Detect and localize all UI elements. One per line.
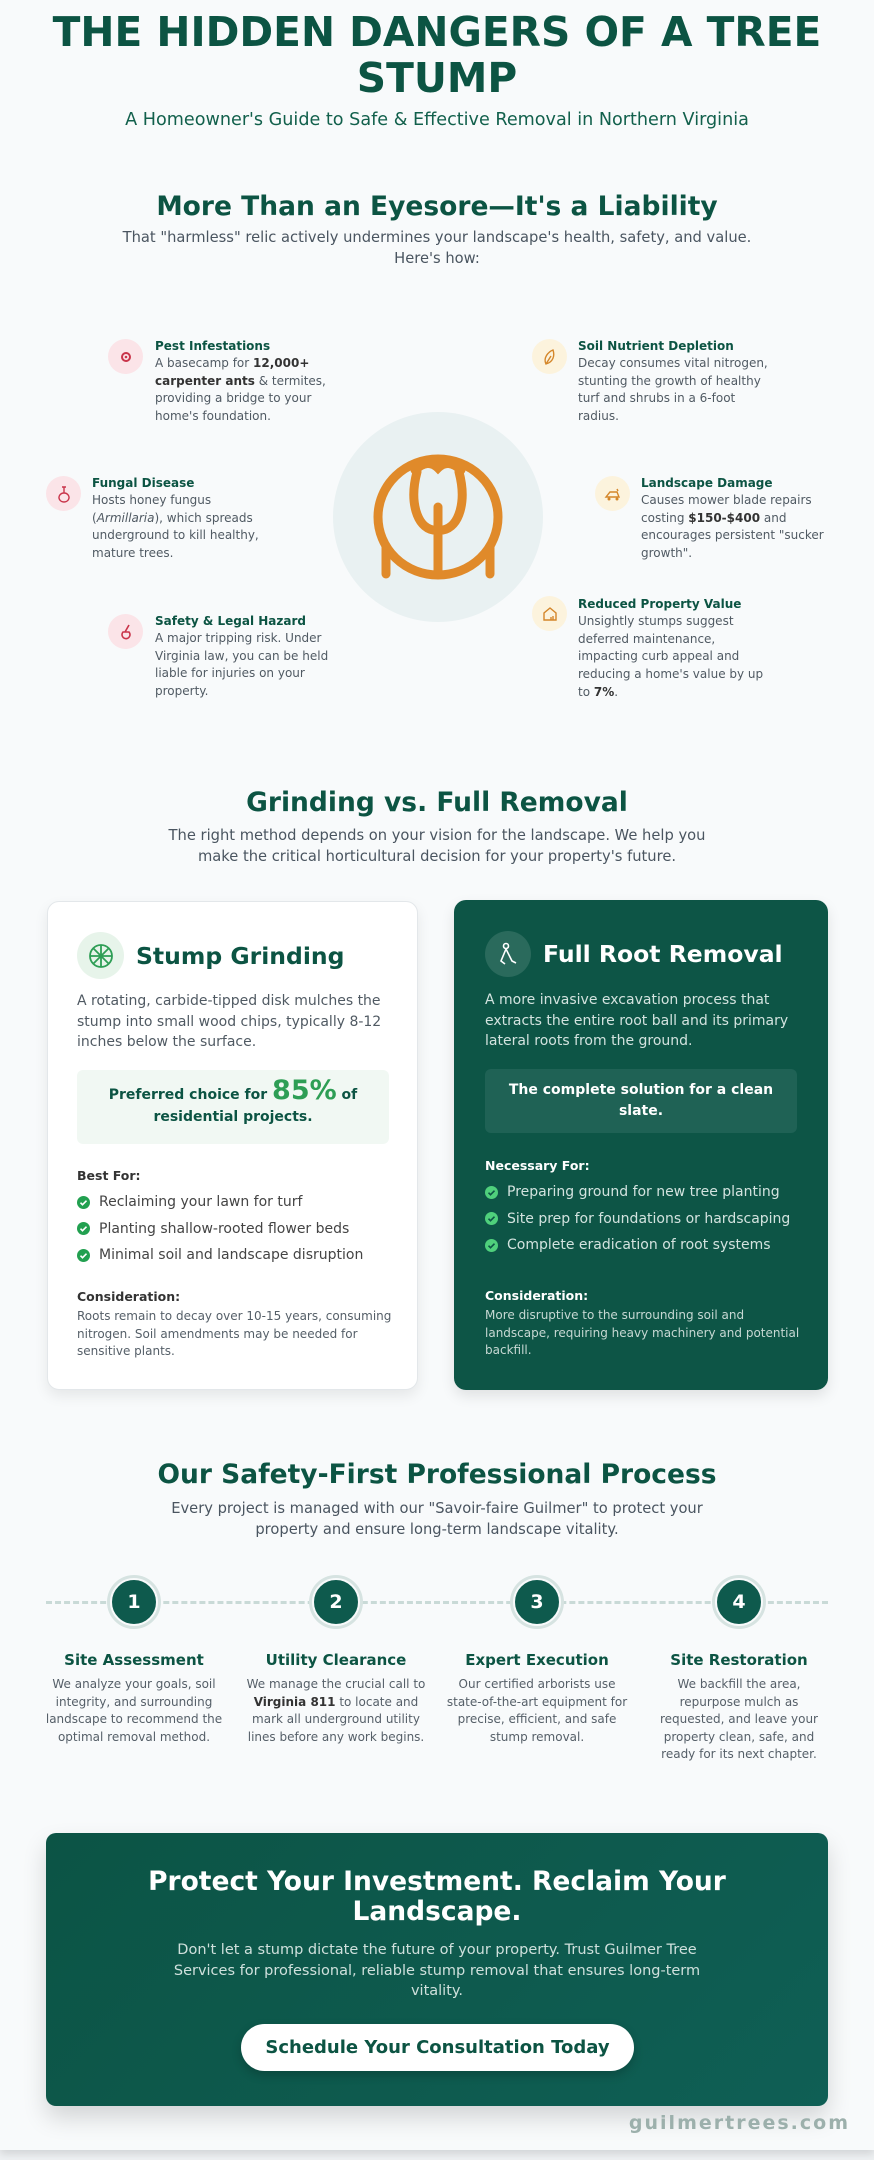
list: best for: Minimal soil and landscape disruption bbox=[99, 1247, 363, 1263]
list: necessary for: Necessary For: bbox=[485, 1158, 590, 1173]
consideration: removal: More disruptive to the surrounding soil and landscape, requiring heavy machinery and potential backfill. bbox=[485, 1308, 799, 1357]
icon: root removal bbox=[485, 931, 531, 977]
item: landscape damage bbox=[595, 476, 824, 560]
central stump illustration bbox=[333, 412, 543, 622]
step text: site assessment: We analyze your goals, soil integrity, and surrounding landscape to recommend the optimal removal method. bbox=[46, 1677, 222, 1744]
step text: expert execution: Expert Execution bbox=[465, 1651, 609, 1669]
icon: flask bbox=[46, 476, 81, 511]
icon: grinder wheel bbox=[77, 932, 124, 979]
text: Causes mower blade repairs costing $150-$400 and encourages persistent "sucker growth". bbox=[641, 493, 824, 560]
text: A basecamp for 12,000+ carpenter ants & termites, providing a bridge to your home's foundation. bbox=[155, 356, 326, 423]
list: necessary for: Preparing ground for new tree planting bbox=[507, 1184, 780, 1200]
item: soil nutrient depletion bbox=[532, 339, 768, 423]
process timeline bbox=[46, 1575, 828, 1629]
item: reduced property value bbox=[532, 596, 763, 699]
title: STUMP bbox=[357, 54, 517, 102]
card title: Stump Grinding bbox=[136, 942, 344, 970]
CTA panel bbox=[46, 1833, 828, 2106]
footer url: guilmertrees.com bbox=[629, 2112, 850, 2134]
step text: utility clearance: Utility Clearance bbox=[266, 1651, 406, 1669]
text: Unsightly stumps suggest deferred maintenance, impacting curb appeal and reducing a home's value by up to 7%. bbox=[578, 614, 763, 699]
CTA button: Schedule Your Consultation Today bbox=[265, 2037, 610, 2058]
list: best for: Reclaiming your lawn for turf bbox=[99, 1194, 302, 1210]
subtitle: A Homeowner's Guide to Safe & Effective Removal in Northern Virginia bbox=[125, 110, 749, 130]
item: fungal disease bbox=[46, 476, 259, 560]
item: pest infestations bbox=[108, 339, 326, 423]
heading: liability: More Than an Eyesore—It's a Liability bbox=[156, 191, 718, 222]
step 4 bbox=[712, 1575, 766, 1629]
step 4: 4 bbox=[732, 1591, 746, 1613]
icon: leaf bbox=[532, 339, 567, 374]
icon: house bbox=[532, 596, 567, 631]
list: best for: Best For: bbox=[77, 1168, 141, 1183]
step 3: 3 bbox=[530, 1591, 544, 1613]
intro text: liability: That "harmless" relic actively undermines your landscape's health, safety, and value. Here's how: bbox=[123, 229, 751, 267]
item: safety legal hazard bbox=[108, 614, 328, 698]
step text: site assessment: Site Assessment bbox=[64, 1651, 204, 1669]
heading: grinding vs removal: Grinding vs. Full Removal bbox=[246, 787, 628, 818]
panel: stump grinding bbox=[47, 901, 418, 1390]
text: Pest Infestations bbox=[155, 339, 270, 353]
text: Landscape Damage bbox=[641, 476, 773, 490]
description: A more invasive excavation process that extracts the entire root ball and its primary lateral roots from the ground. bbox=[485, 992, 788, 1049]
consideration: grinding: Roots remain to decay over 10-15 years, consuming nitrogen. Soil amendments may be needed for sensitive plants. bbox=[77, 1309, 391, 1358]
step 2 bbox=[309, 1575, 363, 1629]
CTA text: Don't let a stump dictate the future of your property. Trust Guilmer Tree Services for professional, reliable stump removal that ensures long-term vitality. bbox=[174, 1942, 700, 1999]
text: Fungal Disease bbox=[92, 476, 194, 490]
stat callout: 85%: Preferred choice for 85% of bbox=[109, 1075, 357, 1106]
consideration: grinding: Consideration: bbox=[77, 1289, 180, 1304]
CTA button bbox=[241, 2024, 634, 2071]
list: best for bbox=[77, 1168, 363, 1263]
list: necessary for: Complete eradication of root systems bbox=[507, 1237, 771, 1253]
step text: site restoration: Site Restoration bbox=[670, 1651, 808, 1669]
icon: mower bbox=[595, 476, 630, 511]
stat callout: 85%: residential projects. bbox=[153, 1109, 313, 1125]
step 1: 1 bbox=[127, 1591, 141, 1613]
panel: full root removal bbox=[454, 900, 828, 1390]
step 3 bbox=[510, 1575, 564, 1629]
list: best for: Planting shallow-rooted flower beds bbox=[99, 1221, 349, 1237]
icon: hazard bbox=[108, 614, 143, 649]
text: Soil Nutrient Depletion bbox=[578, 339, 734, 353]
intro text: process: Every project is managed with our "Savoir-faire Guilmer" to protect your property and ensure long-term landscape vitality. bbox=[171, 1500, 703, 1538]
stat callout: 85% bbox=[77, 1070, 389, 1144]
step 1 bbox=[107, 1575, 161, 1629]
text: A major tripping risk. Under Virginia law, you can be held liable for injuries on your property. bbox=[155, 631, 328, 698]
CTA heading: Protect Your Investment. Reclaim Your Landscape. bbox=[148, 1866, 726, 1927]
icon: bug bbox=[108, 339, 143, 374]
title: THE HIDDEN DANGERS OF A TREE bbox=[53, 8, 821, 56]
step text: site restoration: We backfill the area, repurpose mulch as requested, and leave your property clean, safe, and ready for its next chapter. bbox=[660, 1677, 818, 1761]
list: necessary for bbox=[485, 1158, 790, 1253]
intro text: comparison: The right method depends on your vision for the landscape. We help you make the critical horticultural decision for your property's future. bbox=[169, 827, 705, 865]
step text: expert execution: Our certified arborists use state-of-the-art equipment for precise, efficient, and safe stump removal. bbox=[447, 1677, 627, 1744]
heading: process: Our Safety-First Professional Process bbox=[157, 1459, 717, 1490]
text: Safety & Legal Hazard bbox=[155, 614, 306, 628]
text: Hosts honey fungus (Armillaria), which spreads underground to kill healthy, mature trees. bbox=[92, 493, 259, 560]
title bbox=[52, 8, 821, 102]
list: necessary for: Site prep for foundations or hardscaping bbox=[507, 1211, 790, 1227]
callout: clean slate: The complete solution for a clean slate. bbox=[509, 1082, 773, 1119]
callout: clean slate bbox=[485, 1069, 797, 1133]
step text: utility clearance: We manage the crucial call to Virginia 811 to locate and mark all underground utility lines before any work begins. bbox=[247, 1677, 425, 1744]
text: Reduced Property Value bbox=[578, 597, 741, 611]
description: A rotating, carbide-tipped disk mulches the stump into small wood chips, typically 8-12 inches below the surface. bbox=[77, 993, 381, 1050]
card title: Full Root Removal bbox=[543, 940, 783, 968]
step 2: 2 bbox=[329, 1591, 343, 1613]
text: Decay consumes vital nitrogen, stunting the growth of healthy turf and shrubs in a 6-foot radius. bbox=[578, 356, 768, 423]
consideration: removal: Consideration: bbox=[485, 1288, 588, 1303]
